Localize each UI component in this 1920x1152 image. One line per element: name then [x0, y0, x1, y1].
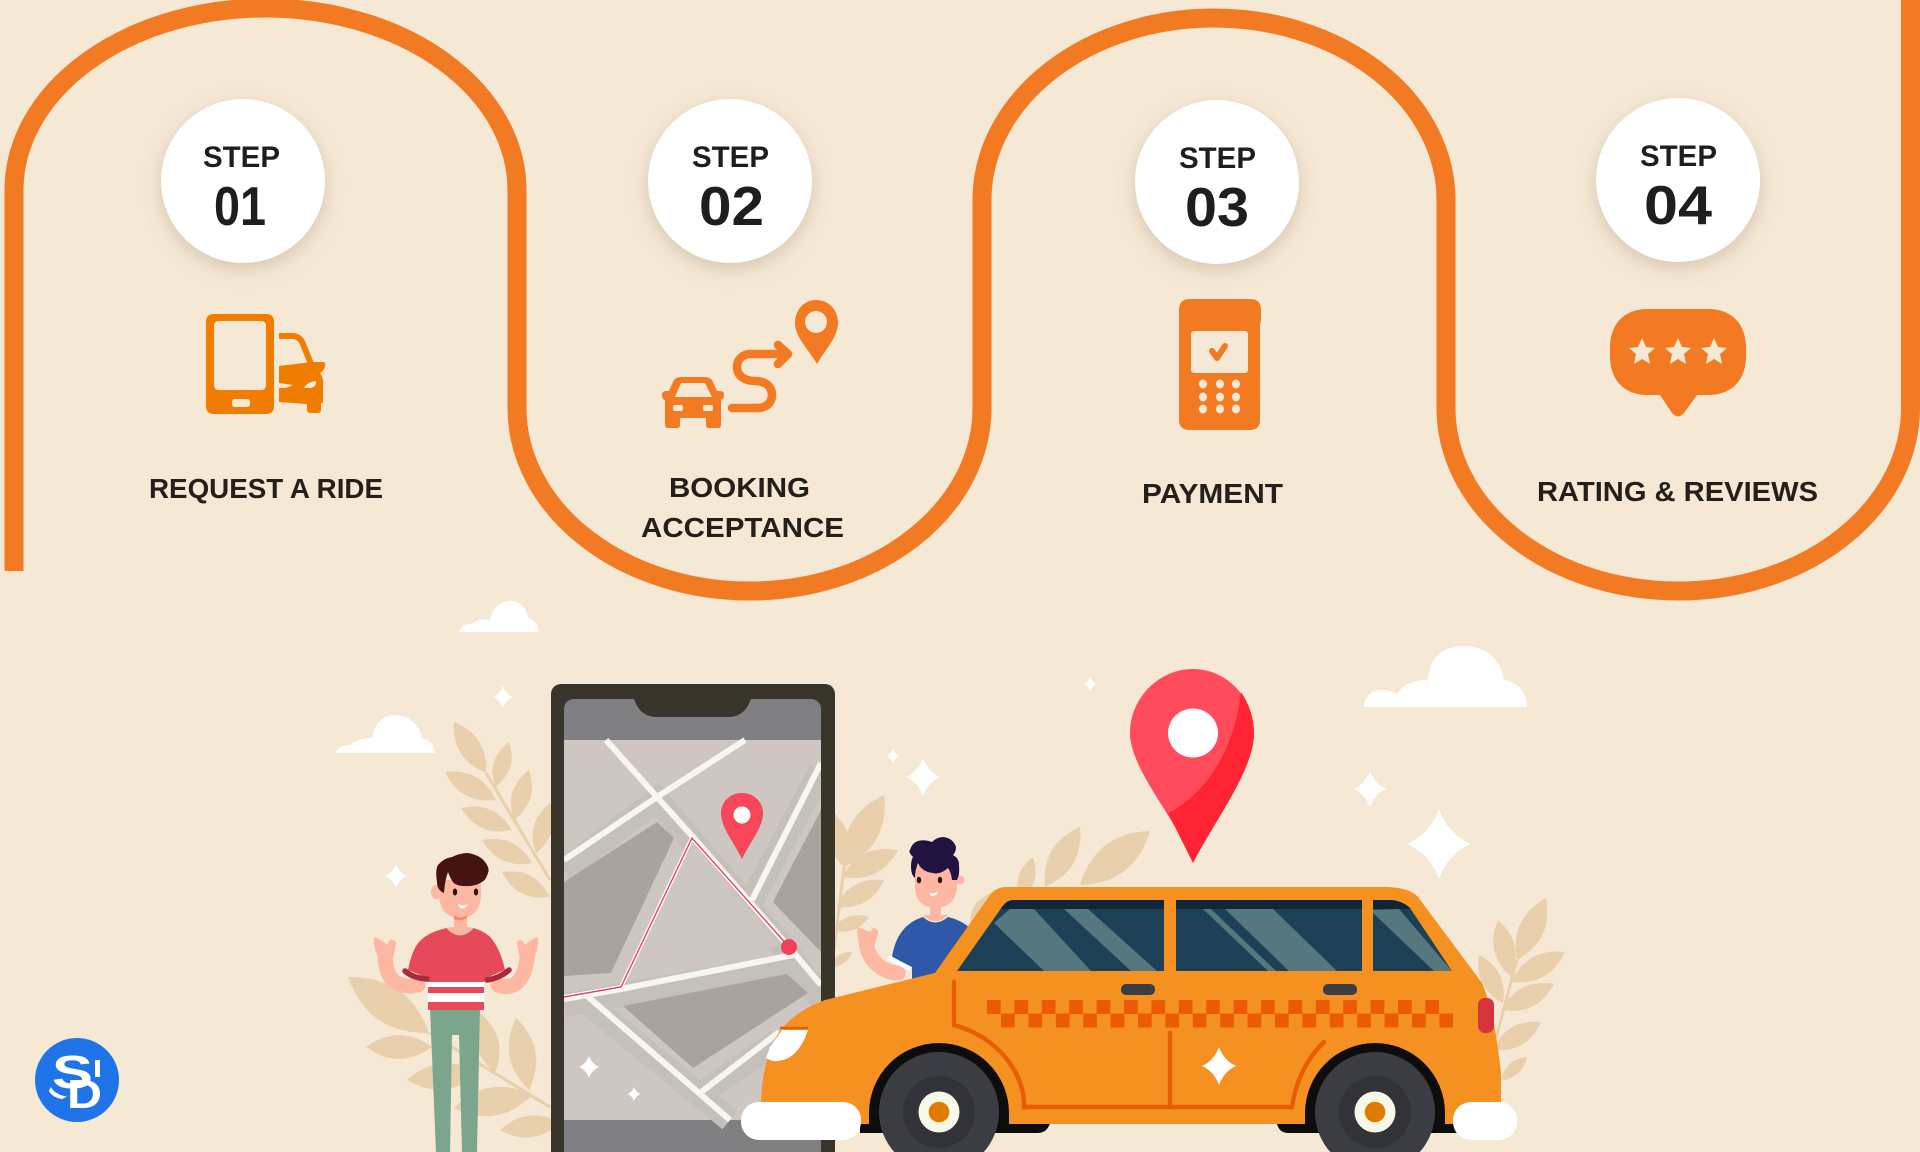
logo badge: [35, 1038, 119, 1122]
car underbody: [860, 1120, 1458, 1133]
map grey blocks: [564, 810, 821, 1068]
car door sparkle: [1202, 1047, 1236, 1085]
phone screen map: [564, 699, 821, 1152]
person face: [917, 877, 942, 896]
person in blue shirt behind car: [857, 837, 972, 985]
taxi checker stripe: [987, 1007, 1453, 1020]
man hands: [374, 937, 538, 958]
step 03 badge: STEP: [1179, 142, 1256, 175]
rear bumper: [1453, 1102, 1517, 1140]
car door lines: [954, 982, 1324, 1107]
map roads: [564, 740, 821, 1120]
step 04 badge: [1596, 98, 1760, 262]
man head: [439, 880, 481, 918]
man face: [453, 888, 478, 908]
man arms: [385, 952, 528, 987]
label: request a ride: REQUEST A RIDE: [149, 473, 383, 504]
icon: car route to pin: [662, 300, 838, 428]
man in red shirt: [374, 853, 538, 1152]
person arm: [866, 938, 898, 973]
step 04: [1537, 98, 1818, 507]
step 02 badge: [648, 99, 812, 263]
icon: phone and car: [206, 314, 325, 414]
map route dot: [781, 939, 797, 955]
background leaves: [338, 716, 1570, 1141]
large location pin: [1130, 669, 1254, 863]
car door handles: [1121, 984, 1357, 995]
person ear: [956, 876, 964, 884]
step 02 badge: 02: [699, 175, 764, 237]
label: booking acceptance: ACCEPTANCE: [641, 512, 844, 543]
winding orange road path: [14, 0, 1910, 591]
phone notch: [634, 699, 751, 717]
icon: payment terminal: [1179, 299, 1261, 430]
label: booking acceptance: BOOKING: [669, 472, 810, 503]
step 01: [149, 99, 383, 504]
person hand: [857, 927, 878, 948]
step 02 badge: STEP: [692, 141, 769, 174]
window reflections: [994, 909, 1452, 971]
front bumper: [741, 1102, 861, 1140]
map road margins: [711, 1120, 730, 1130]
step 01 badge: 01: [214, 175, 266, 237]
label: booking acceptance: [641, 472, 844, 543]
car body: [761, 887, 1501, 1124]
phone with map: [551, 684, 835, 1152]
step 01 badge: [161, 99, 325, 263]
car windows: [957, 900, 1452, 971]
phone frame: [551, 684, 835, 1152]
man shirt stripes: [428, 982, 484, 1002]
sparkles: [385, 677, 1471, 888]
person shirt: [892, 917, 972, 985]
person sleeve cuff: [888, 957, 910, 969]
taxi car: [741, 887, 1517, 1152]
tail light: [1478, 998, 1494, 1033]
map triangle block: [627, 843, 780, 982]
step 04 badge: 04: [1644, 174, 1712, 236]
front wheel: [869, 1043, 1009, 1152]
map pin: [721, 793, 763, 859]
logo badge: S: [52, 1046, 93, 1098]
man ear: [431, 885, 441, 899]
man trousers: [430, 1008, 480, 1152]
step 03: [1135, 100, 1299, 509]
man sleeve cuffs: [405, 970, 509, 980]
man neck: [447, 915, 473, 936]
step 01 badge: STEP: [203, 141, 280, 174]
step 02: [641, 99, 844, 543]
step 04 badge: STEP: [1640, 140, 1717, 173]
clouds: [336, 601, 1527, 753]
map route line: [564, 838, 789, 997]
man shirt: [408, 928, 505, 1010]
rear wheel: [1305, 1043, 1445, 1152]
man neck shadow: [454, 915, 467, 920]
map sparkles: [579, 1056, 640, 1101]
man hair: [436, 853, 489, 893]
step 03 badge: 03: [1185, 176, 1249, 238]
logo badge: D: [67, 1071, 102, 1117]
person hair: [909, 837, 959, 880]
icon: rating speech bubble: [1610, 309, 1746, 416]
person neck and head: [915, 865, 957, 922]
headlight: [766, 1028, 808, 1061]
label: payment: PAYMENT: [1142, 478, 1283, 509]
label: rating and reviews: RATING & REVIEWS: [1537, 476, 1818, 507]
step 03 badge: [1135, 100, 1299, 264]
